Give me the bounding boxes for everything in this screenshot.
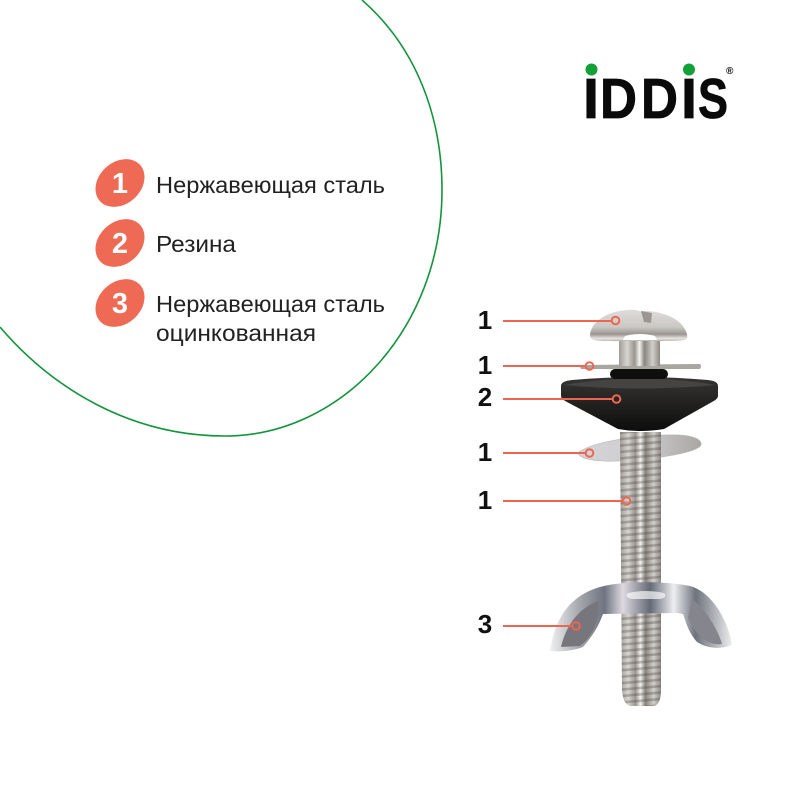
rim highlight <box>563 378 716 388</box>
logo: IDDIS: S <box>698 67 728 131</box>
callout 6: wing nut <box>478 609 580 639</box>
o-ring <box>610 369 668 379</box>
shank <box>619 340 660 366</box>
callout 2: upper washer <box>478 350 593 380</box>
logo: IDDIS: I <box>681 67 697 131</box>
legend item 1 <box>86 149 385 217</box>
bolt product illustration <box>550 310 732 706</box>
callout 3: rubber <box>478 382 620 412</box>
callout 5: bolt <box>478 485 630 515</box>
legend item 2 <box>86 209 236 277</box>
legend item 3: оцинкованная <box>156 320 316 346</box>
logo: IDDIS <box>583 64 734 131</box>
logo: IDDIS: D <box>600 67 637 131</box>
callout 5: bolt: 1 <box>478 485 492 515</box>
screw head <box>590 310 687 341</box>
wing nut <box>550 582 732 651</box>
callout 4: lower washer <box>478 437 593 467</box>
logo: IDDIS: ® <box>726 66 734 77</box>
legend item 3: Нержавеющая сталь <box>156 291 385 317</box>
logo: IDDIS: I <box>583 67 599 131</box>
callout 6: wing nut: 3 <box>478 609 492 639</box>
legend item 1: Нержавеющая сталь <box>156 172 385 198</box>
callout 1: screw head <box>478 305 619 335</box>
callout 3: rubber: 2 <box>478 382 492 412</box>
lower washer back <box>578 435 701 461</box>
rubber cone <box>561 377 718 431</box>
legend item 1: 1 <box>112 168 128 200</box>
callout 1: screw head: 1 <box>478 305 492 335</box>
logo: IDDIS: D <box>641 67 678 131</box>
callout 4: lower washer: 1 <box>478 437 492 467</box>
callout 2: upper washer: 1 <box>478 350 492 380</box>
legend item 3: 3 <box>112 288 128 320</box>
legend item 2: Резина <box>156 231 236 257</box>
upper washer <box>579 364 701 369</box>
green circle outline <box>0 0 442 436</box>
legend item 3 <box>86 269 385 346</box>
bolt thread <box>620 432 661 706</box>
legend item 2: 2 <box>112 228 128 260</box>
